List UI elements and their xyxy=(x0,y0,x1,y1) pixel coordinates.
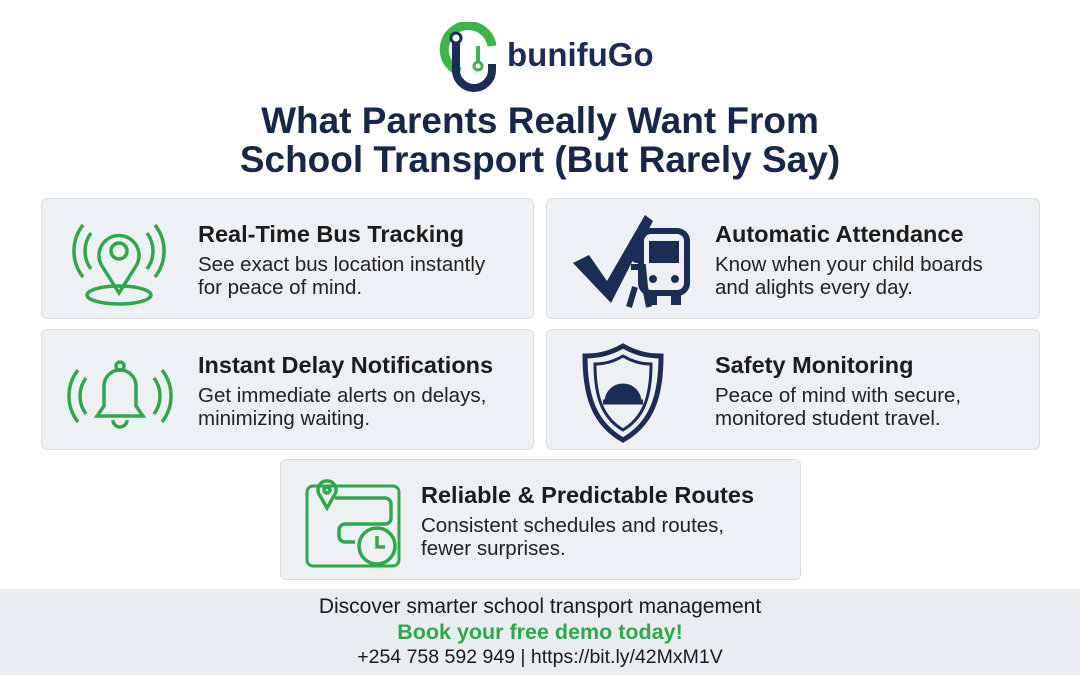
icon: bell xyxy=(67,360,173,429)
logo: bunifuGo xyxy=(507,36,654,73)
panel: attendance: and alights every day. xyxy=(715,276,913,299)
panel: safety: monitored student travel. xyxy=(715,407,941,430)
panel: routes: Reliable & Predictable Routes xyxy=(421,482,754,508)
footer: Discover smarter school transport management xyxy=(319,595,761,618)
title: School Transport (But Rarely Say) xyxy=(240,139,840,180)
panel: delay notifications: Instant Delay Notifications xyxy=(198,352,493,378)
panel: safety xyxy=(546,329,1040,450)
panel: real-time tracking xyxy=(41,198,534,319)
icon: shield helmet xyxy=(582,343,664,443)
panel: safety: Peace of mind with secure, xyxy=(715,384,961,407)
panel: attendance: Automatic Attendance xyxy=(715,221,964,247)
panel: delay notifications xyxy=(41,329,534,450)
footer xyxy=(0,589,1080,675)
icon: route map clock xyxy=(306,479,400,568)
panel: delay notifications: Get immediate alerts on delays, xyxy=(198,384,486,407)
panel: attendance xyxy=(546,198,1040,319)
panel: routes xyxy=(280,459,801,580)
footer: Book your free demo today! xyxy=(397,620,683,644)
logo xyxy=(440,22,654,92)
panel: attendance: Know when your child boards xyxy=(715,253,983,276)
panel: real-time tracking: Real-Time Bus Tracking xyxy=(198,221,464,247)
footer: +254 758 592 949 | https://bit.ly/42MxM1V xyxy=(357,646,723,668)
panel: safety: Safety Monitoring xyxy=(715,352,913,378)
title xyxy=(240,100,840,180)
panel: real-time tracking: See exact bus location instantly xyxy=(198,253,485,276)
icon: location signal xyxy=(72,224,166,306)
panel: delay notifications: minimizing waiting. xyxy=(198,407,370,430)
icon: check + bus + child xyxy=(573,215,690,308)
panel: real-time tracking: for peace of mind. xyxy=(198,276,362,299)
panel: routes: fewer surprises. xyxy=(421,537,566,560)
panel: routes: Consistent schedules and routes, xyxy=(421,514,724,537)
title: What Parents Really Want From xyxy=(261,100,819,141)
